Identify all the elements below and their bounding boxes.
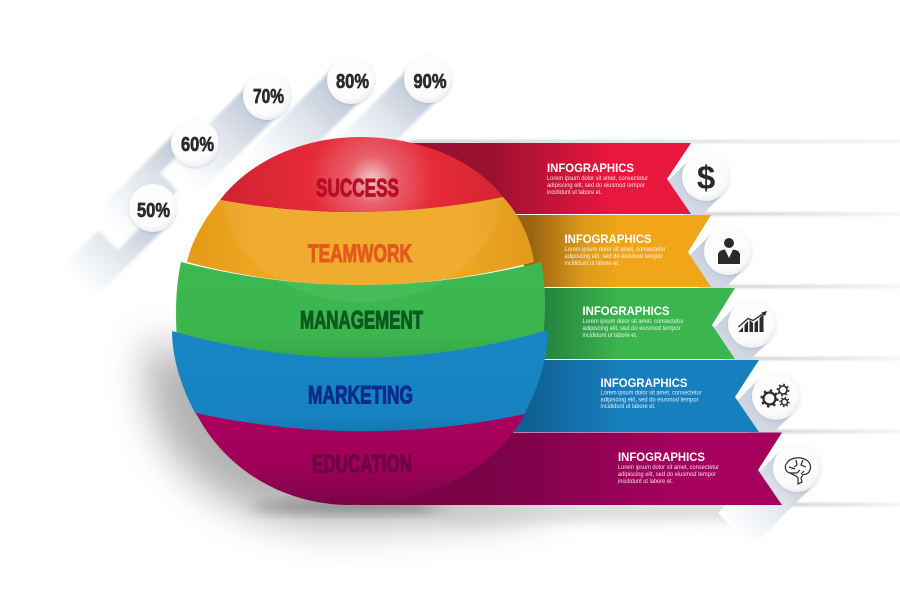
text block: red ribbon: Lorem ipsum dolor sit amet, consectetur [547,175,648,182]
icon circle: growth chart [728,300,776,348]
percent bubble: 80%: 80% [336,71,369,93]
label: teamwork: TEAMWORK [308,240,412,268]
text block: red ribbon: adipiscing elit, sed do eiusmod tempor [547,182,645,189]
label: management: MANAGEMENT [300,306,423,334]
icon circle: dollar: $ [697,159,715,196]
percent long shadows [56,64,443,305]
percent bubble: 60%: 60% [181,134,214,156]
sphere ground shadow [147,340,770,526]
text block: green ribbon: adipiscing elit, sed do eiusmod tempor [582,325,680,332]
text block: green ribbon: Lorem ipsum dolor sit amet, consectetur [582,318,684,325]
ribbon separator lines [410,140,900,506]
icon circle: brain [773,444,821,492]
text block: red ribbon [547,175,648,196]
text block: red ribbon: incididunt ut labore et. [547,189,602,196]
percent bubble: 70% [243,72,291,120]
sphere band: magenta [196,413,525,505]
text block: magenta ribbon [618,464,719,485]
panel: ribbon green [530,288,735,359]
sphere band: red [220,137,503,212]
heading: blue ribbon: INFOGRAPHICS [600,376,688,390]
sphere band: blue [172,330,548,438]
percent bubble: 50%: 50% [137,200,170,222]
percent bubble: 80% [327,56,375,104]
percent bubble: 50% [129,184,177,232]
icon circle: dollar [682,153,730,201]
text block: orange ribbon: incididunt ut labore et. [564,260,620,267]
panel: ribbon red [410,143,691,214]
percent bubble: 90%: 90% [414,71,447,93]
sphere highlight lens [223,198,502,302]
percent bubble: 60% [171,119,219,167]
heading: red ribbon: INFOGRAPHICS [547,161,634,175]
text block: orange ribbon [564,246,666,267]
ribbon notch shadows [659,160,814,547]
percent bubble: 90% [404,55,452,103]
heading: orange ribbon: INFOGRAPHICS [564,232,652,246]
percent bubble: 70%: 70% [253,86,284,108]
icon circle: gears [752,372,800,420]
text block: magenta ribbon: adipiscing elit, sed do eiusmod tempor [618,471,716,478]
label: success: SUCCESS [316,174,399,202]
text block: orange ribbon: Lorem ipsum dolor sit amet, consectetur [564,246,666,253]
label: education: EDUCATION [312,450,412,478]
sphere band: green [176,262,545,368]
text block: orange ribbon: adipiscing elit, sed do eiusmod tempor [564,253,662,260]
text block: magenta ribbon: incididunt ut labore et. [618,478,673,485]
icon circle: person [704,227,752,275]
panel: ribbon blue [510,360,759,432]
sphere [172,137,548,505]
text block: blue ribbon: adipiscing elit, sed do eiusmod tempor [600,396,698,404]
text block: green ribbon: incididunt ut labore et. [582,332,638,339]
text block: magenta ribbon: Lorem ipsum dolor sit amet, consectetur [618,464,719,471]
text block: blue ribbon [600,390,702,410]
text block: green ribbon [582,318,684,339]
heading: green ribbon: INFOGRAPHICS [582,304,670,318]
label: marketing: MARKETING [308,382,413,410]
text block: blue ribbon: incididunt ut labore et. [600,403,656,410]
panel: ribbon magenta [360,432,782,505]
sphere band: orange [187,197,534,285]
text block: blue ribbon: Lorem ipsum dolor sit amet, consectetur [600,390,702,396]
heading: magenta ribbon: INFOGRAPHICS [618,450,705,464]
panel: ribbon orange [510,215,711,287]
